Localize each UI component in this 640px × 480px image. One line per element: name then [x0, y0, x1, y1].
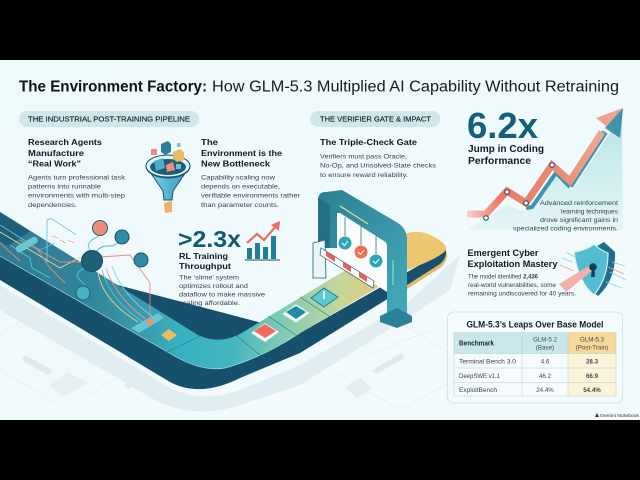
text block: cyber: The model identified 2,436	[468, 274, 538, 280]
comparison table: GLM-5.2	[533, 336, 558, 344]
comparison table: 24.4%	[536, 387, 554, 394]
comparison table: Benchmark	[459, 340, 494, 348]
text block: research agents: dependencies.	[28, 202, 77, 209]
conveyor shadow	[0, 255, 460, 411]
stat: RL throughput: >2.3x	[178, 226, 241, 252]
stat: RL throughput: scaling affordable.	[179, 300, 240, 307]
circuit wiring	[0, 219, 152, 322]
comparison table: ExploitBench	[459, 387, 497, 394]
stat: RL throughput: Throughput	[179, 261, 231, 271]
line chart arrow	[467, 108, 623, 230]
comparison table: 28.3	[586, 358, 599, 366]
comparison table: 66.9	[586, 373, 599, 380]
text block: research agents: environments with multi-step	[28, 192, 125, 200]
stat: 6.2x heading: 6.2x	[467, 105, 538, 146]
stat: 6.2x heading	[467, 105, 544, 167]
title: How GLM-5.3 Multiplied AI Capability Without Retraining	[212, 78, 619, 96]
text block: reinforcement learning	[513, 200, 619, 232]
conveyor belt	[0, 212, 447, 389]
text block: cyber: real-world vulnerabilities, some	[468, 282, 556, 289]
icon: mini bar chart	[245, 221, 280, 260]
tile: teal	[282, 304, 310, 323]
floor grid decoration	[0, 310, 470, 410]
section pill: pipeline	[19, 111, 199, 127]
text block: bottleneck: The	[201, 137, 218, 147]
section pill: pipeline: THE INDUSTRIAL POST-TRAINING PIPELINE	[28, 114, 190, 124]
text block: research agents: Agents turn professional task	[28, 174, 126, 182]
text block: cyber: remaining undiscovered for 40 years.	[468, 290, 576, 298]
table title: GLM-5.3’s Leaps Over Base Model	[466, 320, 604, 330]
icon: shield	[559, 242, 626, 296]
text block: bottleneck: verifiable environments rather	[201, 192, 301, 200]
comparison table: DeepSWE v1.1	[459, 373, 500, 380]
comparison table	[454, 332, 616, 396]
text block: reinforcement learning: learning techniques	[561, 208, 619, 216]
comparison table: 4.6	[541, 358, 550, 366]
stat: RL throughput: RL Training	[179, 251, 228, 261]
table panel	[448, 312, 622, 403]
text block: research agents: patterns into runnable	[28, 184, 101, 190]
watermark: Gemini Notebook	[600, 413, 640, 418]
text block: bottleneck: depends on executable,	[201, 184, 280, 190]
title	[19, 78, 619, 96]
text block: reinforcement learning: drove significant gains in	[540, 217, 618, 224]
stat: 6.2x heading: Jump in Coding	[468, 144, 544, 155]
text block: cyber: Emergent Cyber	[468, 248, 539, 258]
tile: check	[311, 288, 338, 307]
gate	[318, 190, 412, 328]
text block: cyber: Exploitation Mastery	[468, 259, 558, 269]
text block: reinforcement learning: Advanced reinforcement	[540, 200, 618, 207]
text block: triple-check gate: The Triple-Check Gate	[320, 137, 417, 147]
comparison table: (Base)	[536, 344, 554, 352]
text block: research agents: “Real Work”	[28, 158, 81, 168]
text block: research agents: Manufacture	[28, 148, 84, 158]
comparison table: 54.4%	[583, 387, 601, 394]
comparison table: (Post-Train)	[576, 344, 608, 352]
stat: RL throughput	[178, 226, 265, 307]
text block: triple-check gate	[320, 137, 437, 179]
text block: research agents: Research Agents	[28, 137, 102, 147]
text block: bottleneck: New Bottleneck	[201, 158, 270, 168]
comparison table: GLM-5.3	[580, 336, 605, 344]
text block: bottleneck: Capability scaling now	[201, 174, 275, 182]
tile: red	[251, 323, 279, 342]
text block: reinforcement learning: specialized coding environments.	[513, 226, 618, 232]
infographic background	[0, 60, 640, 420]
text block: bottleneck: Environment is the	[201, 148, 282, 158]
stat: 6.2x heading: Performance	[468, 156, 532, 167]
section pill: verifier	[310, 111, 440, 127]
circuit nodes	[15, 220, 177, 341]
text block: bottleneck	[201, 137, 301, 209]
text block: triple-check gate: to ensure reward reliability.	[320, 172, 408, 179]
comparison table: Terminal Bench 3.0	[459, 358, 516, 366]
barrier	[313, 240, 374, 288]
text block: cyber	[468, 248, 576, 298]
section pill: verifier: THE VERIFIER GATE & IMPACT	[320, 114, 432, 124]
title: The Environment Factory:	[19, 78, 207, 96]
text block: triple-check gate: No-Op, and Unsolved-State checks	[320, 162, 437, 170]
text block: research agents	[28, 137, 126, 209]
verifier checks	[338, 217, 382, 268]
text block: triple-check gate: Verifiers must pass Oracle,	[320, 154, 407, 160]
text block: bottleneck: than parameter counts.	[201, 202, 279, 209]
icon: funnel	[146, 141, 190, 213]
stat: RL throughput: optimizes rollout and	[179, 283, 248, 290]
comparison table: 46.2	[539, 373, 552, 380]
stat: RL throughput: dataflow to make massive	[179, 292, 265, 298]
stat: RL throughput: The ‘slime’ system	[179, 274, 239, 282]
